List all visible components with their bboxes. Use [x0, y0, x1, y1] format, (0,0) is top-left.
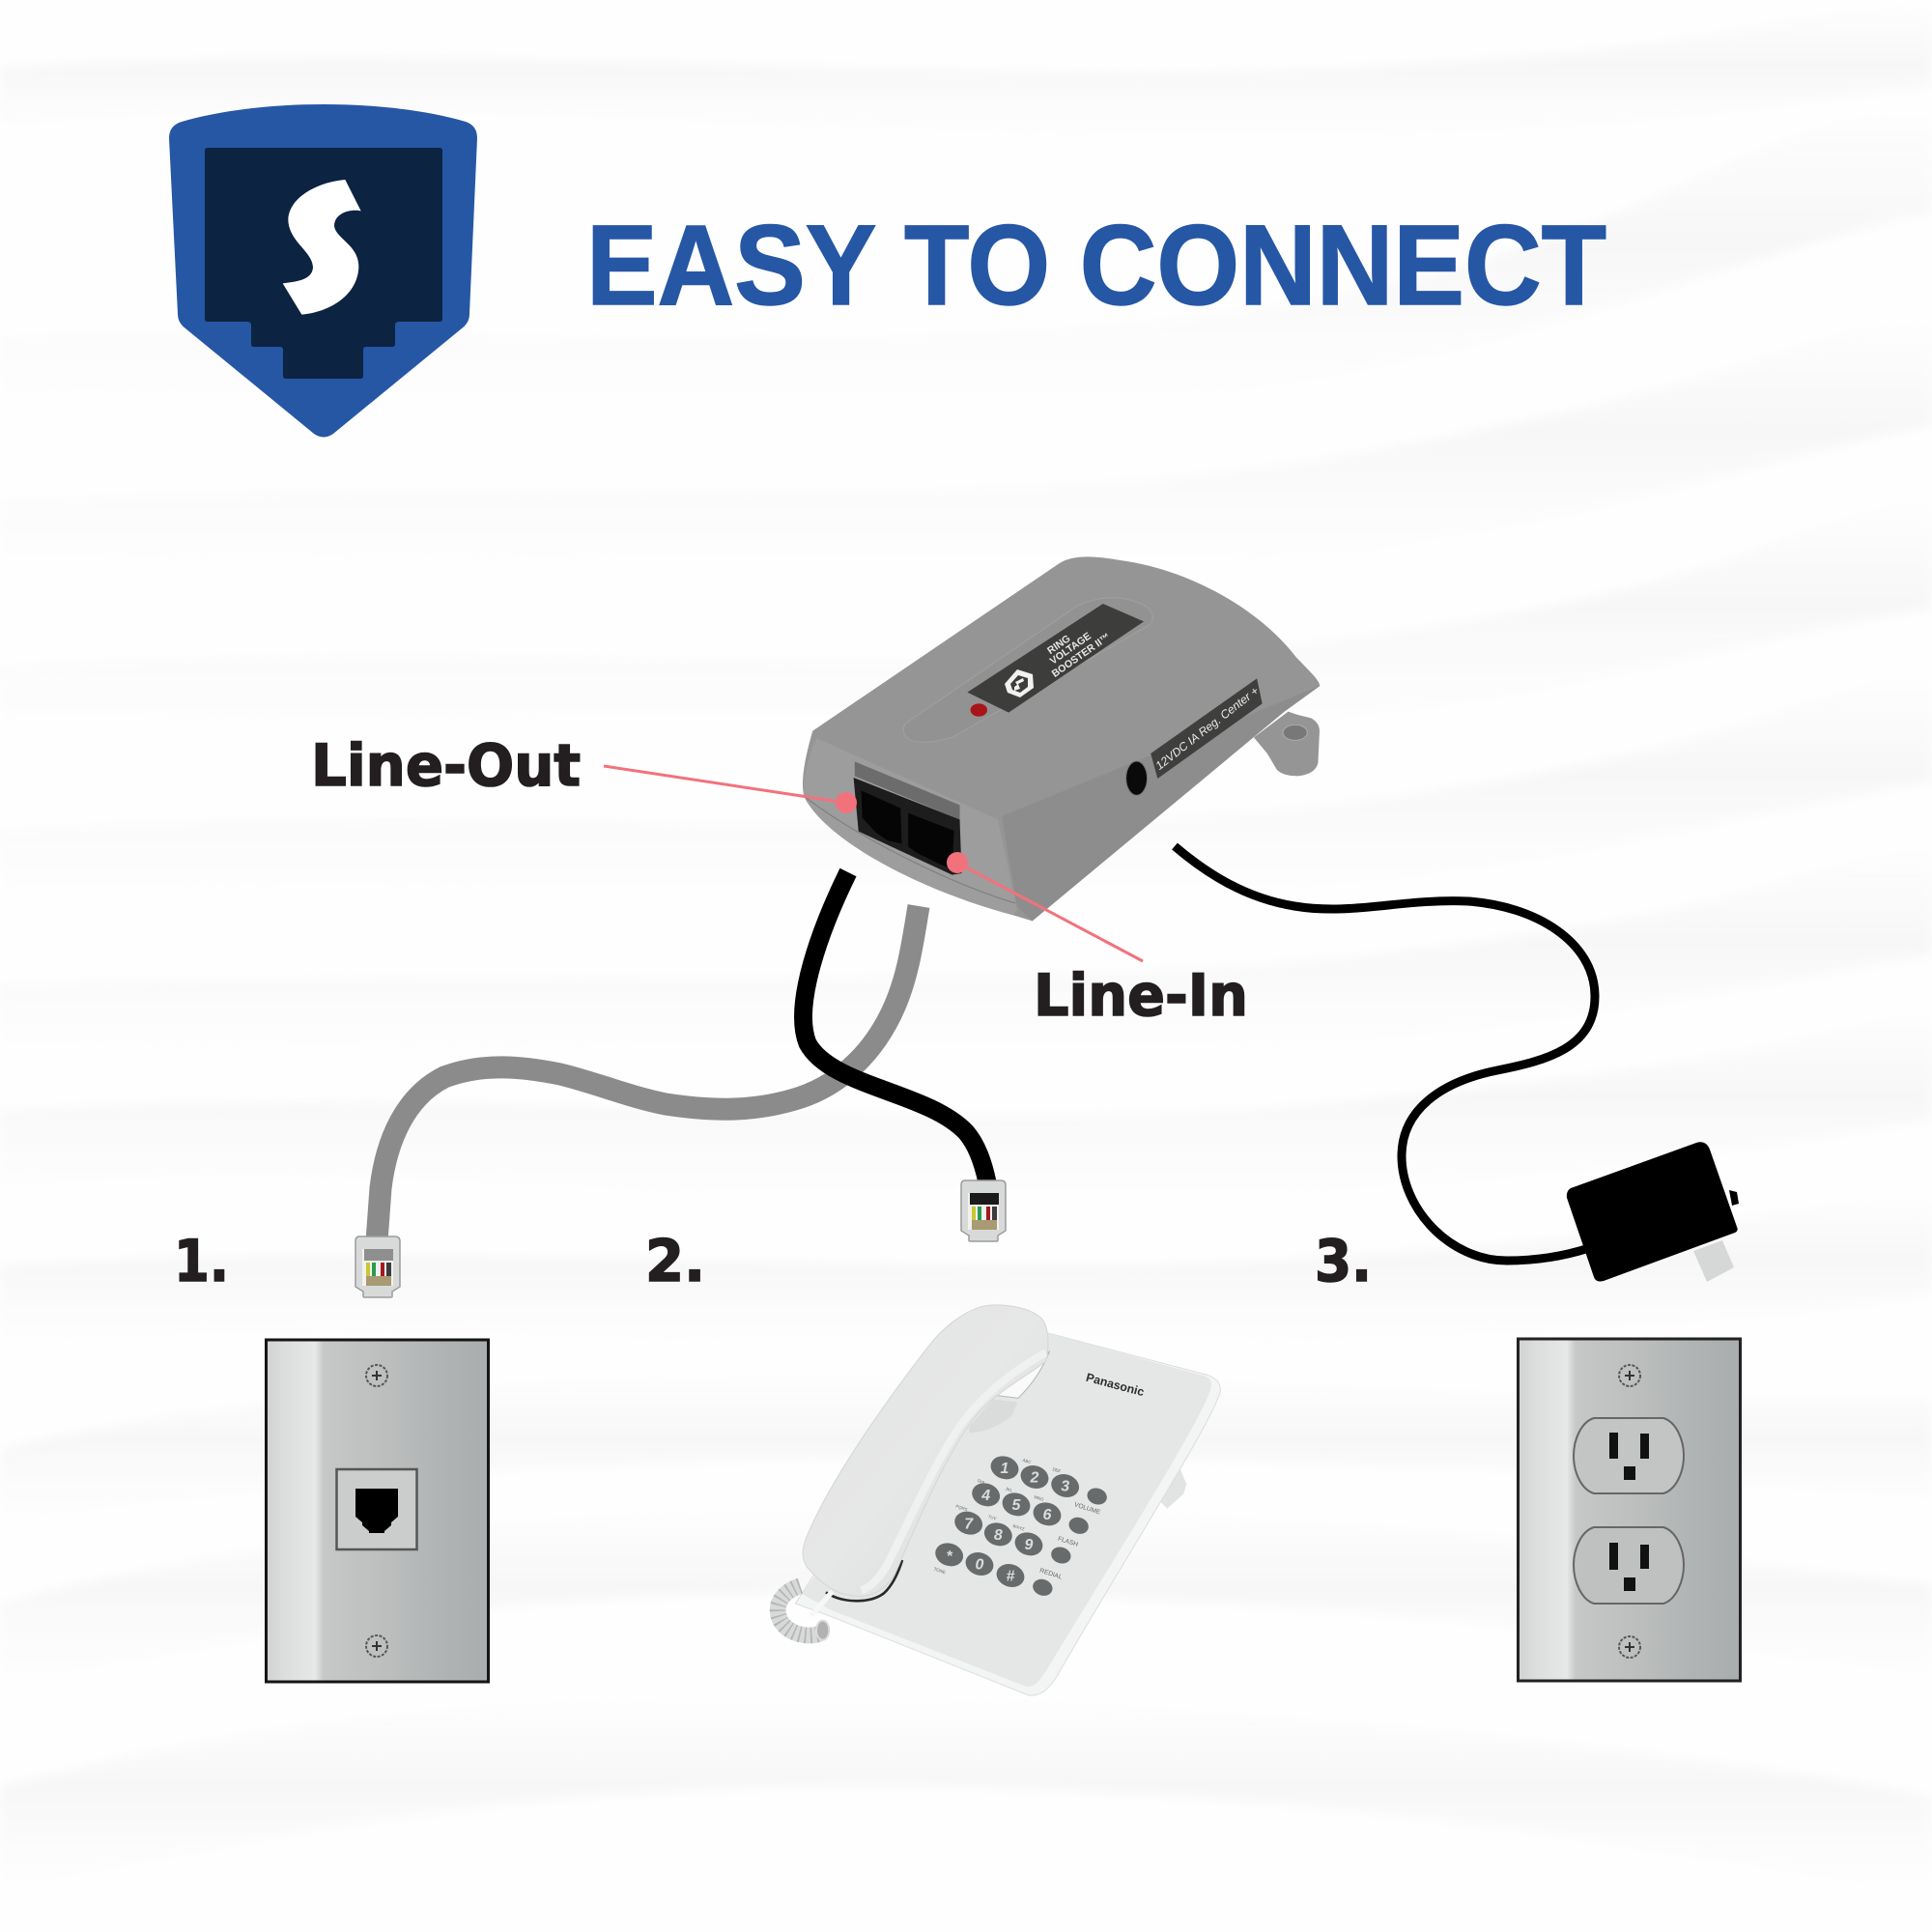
step number 1: 1. [174, 1228, 229, 1295]
plate text: VOLTAGE [1048, 631, 1094, 668]
key digits: # [1007, 1569, 1015, 1585]
key labels: FLASH [1057, 1536, 1079, 1548]
key digits: 7 [964, 1516, 974, 1532]
receptacle top [1574, 1418, 1684, 1493]
key labels: GHI [977, 1478, 985, 1485]
RJ11 plug 1 [355, 1236, 400, 1297]
base [795, 1333, 1220, 1695]
screw bottom [366, 1635, 387, 1657]
phone jacks [854, 778, 961, 875]
key labels: VOLUME [1073, 1501, 1101, 1517]
recessed pill on top [903, 598, 1152, 742]
plate text: RING [1045, 633, 1072, 657]
mounting tab [1254, 712, 1320, 776]
screw top [1619, 1365, 1640, 1386]
step number 2: 2. [645, 1228, 705, 1295]
handset [803, 1305, 1048, 1597]
telephone [778, 1305, 1220, 1695]
plate text: BOOSTER II™ [1050, 631, 1113, 680]
cradle [992, 1350, 1050, 1398]
jack socket [336, 1469, 417, 1549]
callout: Line-In [947, 852, 1248, 1030]
key digits: 3 [1061, 1479, 1069, 1495]
key labels [933, 1458, 1101, 1581]
device: ring voltage booster [803, 556, 1320, 921]
key labels: DEF [1052, 1466, 1062, 1474]
key digits: 6 [1043, 1507, 1052, 1523]
product label plate [967, 604, 1144, 713]
port label strip [855, 761, 960, 819]
title: EASY TO CONNECT [586, 202, 1606, 329]
step number 3: 3. [1315, 1228, 1372, 1295]
RJ11 plug 2 [961, 1180, 1006, 1241]
keypad [932, 1453, 1109, 1598]
screw top [366, 1365, 387, 1386]
key labels: TONE [933, 1567, 947, 1575]
key digits [947, 1461, 1069, 1585]
power outlet plate [1519, 1339, 1741, 1681]
brand: Panasonic [1085, 1371, 1146, 1399]
key digits: 2 [1030, 1470, 1039, 1487]
callout: Line-Out [311, 732, 857, 813]
key digits: 4 [980, 1488, 990, 1504]
device logo on plate [1005, 669, 1034, 697]
power jack [1126, 761, 1148, 795]
key labels: TUV [987, 1514, 997, 1521]
key digits: 5 [1012, 1497, 1022, 1514]
handset shadow [826, 1560, 902, 1601]
key labels: MNO [1034, 1494, 1045, 1502]
black line-out cable [804, 872, 987, 1182]
callout: Line-In: Line-In [1034, 962, 1248, 1030]
key digits: 9 [1025, 1537, 1034, 1553]
key digits: 0 [976, 1557, 984, 1574]
screw bottom [1619, 1636, 1640, 1658]
wall jack plate [267, 1340, 489, 1682]
key labels: WXYZ [1012, 1523, 1026, 1532]
power label text: 12VDC IA Reg. Center + [1152, 684, 1262, 773]
model label plate [1151, 678, 1263, 779]
power cable [1175, 846, 1595, 1261]
logo: shield [169, 104, 477, 437]
foot [1159, 1465, 1186, 1509]
callout: Line-Out: Line-Out [311, 732, 581, 800]
power adapter [1567, 1142, 1739, 1282]
top surface [802, 1333, 1211, 1687]
front face [804, 738, 1017, 915]
key labels: ABC [1022, 1458, 1032, 1464]
key digits: 8 [994, 1527, 1003, 1544]
gray line-in cable [377, 906, 919, 1241]
key labels: PQRS [955, 1504, 968, 1512]
coiled cord [778, 1586, 833, 1640]
key digits: * [947, 1548, 953, 1565]
key digits: 1 [1001, 1461, 1009, 1477]
cradle recess shade [969, 1399, 1017, 1433]
key labels: REDIAL [1038, 1568, 1064, 1581]
device body [803, 556, 1320, 921]
side face [1002, 686, 1320, 921]
status LED [971, 703, 987, 717]
key labels: JKL [1005, 1486, 1013, 1493]
receptacle bottom [1574, 1527, 1684, 1604]
